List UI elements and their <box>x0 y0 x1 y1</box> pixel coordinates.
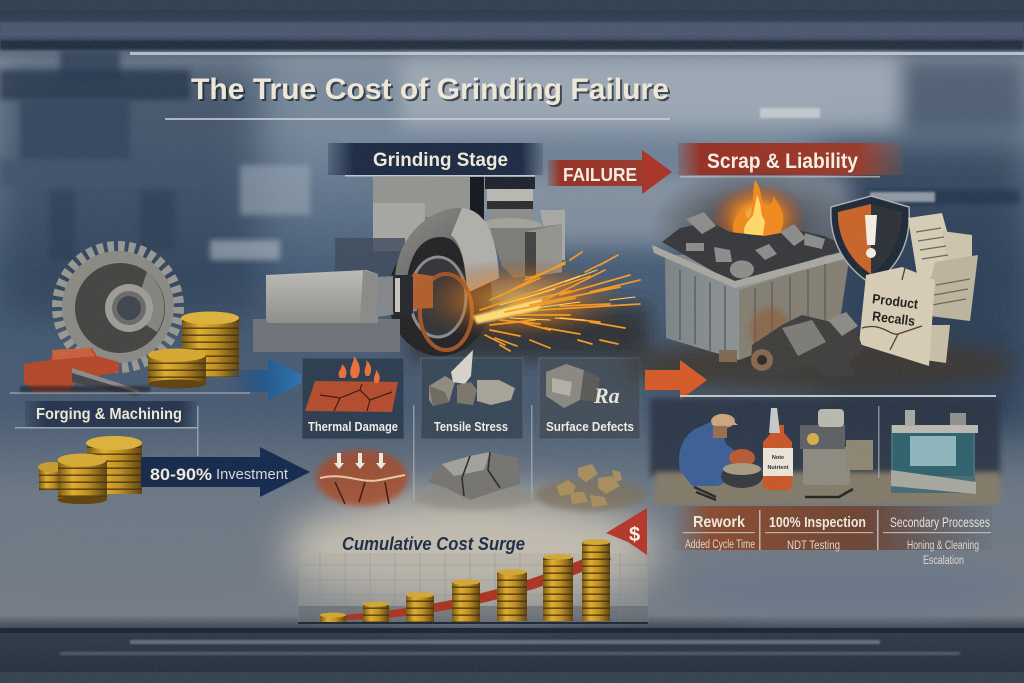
heading: Scrap & Liability: Scrap & Liability <box>707 150 858 173</box>
column: 100% inspection <box>769 514 866 552</box>
panel: grinding stage <box>253 143 650 360</box>
arrow: rising cost trend <box>345 508 647 620</box>
heading: Grinding Stage <box>328 143 543 176</box>
arrow: 80-90% investment: 80-90% <box>150 466 212 484</box>
column: rework: Added Cycle Time <box>685 539 755 551</box>
effects row below panels <box>316 450 645 511</box>
column: 100% inspection: 100% Inspection <box>769 514 866 531</box>
panel: downstream costs <box>650 395 1000 567</box>
icon: scrap dumpster <box>652 212 850 362</box>
icon: cracked hot surface with flames <box>305 356 398 412</box>
column: secondary processes: Honing & Cleaning <box>907 540 979 552</box>
icon: inspection dye bottle: Note <box>772 455 784 461</box>
label: Surface Defects: Surface Defects <box>546 419 634 434</box>
panel: surface defects <box>539 358 640 439</box>
arrow: 80-90% investment: Investment <box>216 467 288 483</box>
label: Forging and Machining: Forging & Machining <box>36 406 182 423</box>
arrow: 80-90% investment <box>141 447 310 497</box>
icon: pitted surface blocks <box>546 364 600 408</box>
arrow: rising cost trend: $ <box>629 524 640 546</box>
icon: inspection dye bottle <box>763 408 793 490</box>
icon: Product Recalls document <box>859 267 935 366</box>
icon: coin stacks <box>38 436 142 504</box>
arrow: orange flow to outcomes <box>645 360 707 400</box>
panel: thermal damage <box>302 356 404 439</box>
icon: warning shield <box>831 196 909 285</box>
icon: broken concrete block <box>415 452 535 510</box>
arrow: FAILURE: FAILURE <box>563 165 637 185</box>
column: secondary processes <box>890 515 990 567</box>
panel: forging and machining <box>10 247 250 456</box>
heading: Cumulative Cost Surge: Cumulative Cost Surge <box>342 534 525 554</box>
icon: inspection dye bottle: Nutrient <box>767 465 789 471</box>
icon: fractured block <box>429 350 515 406</box>
title: The True Cost of Grinding Failure <box>193 75 671 108</box>
investment block <box>38 436 310 504</box>
icon: technician reworking part <box>679 414 763 500</box>
icon: spilled scrap parts <box>751 312 863 379</box>
heading: Grinding Stage: Grinding Stage <box>373 150 508 171</box>
icon: ultrasonic cleaning tank <box>891 410 978 494</box>
icon: NDT inspection machine <box>800 409 873 497</box>
label: Forging and Machining <box>15 401 197 428</box>
icon: subsurface thermal crack <box>316 450 408 506</box>
title: The True Cost of Grinding Failure <box>191 73 669 106</box>
column: rework <box>685 514 755 551</box>
arrow: blue flow into grinding defects <box>225 358 310 400</box>
icon: recall papers <box>908 213 978 363</box>
arrow: FAILURE <box>548 150 672 194</box>
panel: tensile stress <box>421 350 523 439</box>
title <box>165 73 671 120</box>
icon: coin stack, tall <box>181 312 239 377</box>
label: Thermal Damage: Thermal Damage <box>308 419 398 434</box>
column: secondary processes: Secondary Processes <box>890 515 990 530</box>
column: secondary processes: Escalation <box>923 555 964 567</box>
column: 100% inspection: NDT Testing <box>787 540 840 552</box>
icon: coin stack, short <box>148 348 206 388</box>
text: Ra: Ra <box>593 383 620 408</box>
icon: orange sparks <box>410 252 640 351</box>
column: rework: Rework <box>693 514 745 531</box>
icon: machined gear <box>58 247 178 367</box>
icon: flames <box>710 180 806 254</box>
icon: forged red blocks and steel bar <box>24 348 140 396</box>
heading: Scrap & Liability <box>678 143 903 178</box>
icon: grinding machine <box>253 177 565 356</box>
chart: cumulative cost surge <box>298 508 648 624</box>
band: cost labels <box>672 506 992 550</box>
label: Tensile Stress: Tensile Stress <box>434 419 508 434</box>
icon: Product Recalls document: Recalls <box>871 309 916 329</box>
icon: rubble <box>535 464 645 511</box>
coin stacks rising <box>320 539 610 622</box>
panel: scrap and liability <box>625 143 1015 393</box>
icon: Product Recalls document: Product <box>871 291 919 312</box>
